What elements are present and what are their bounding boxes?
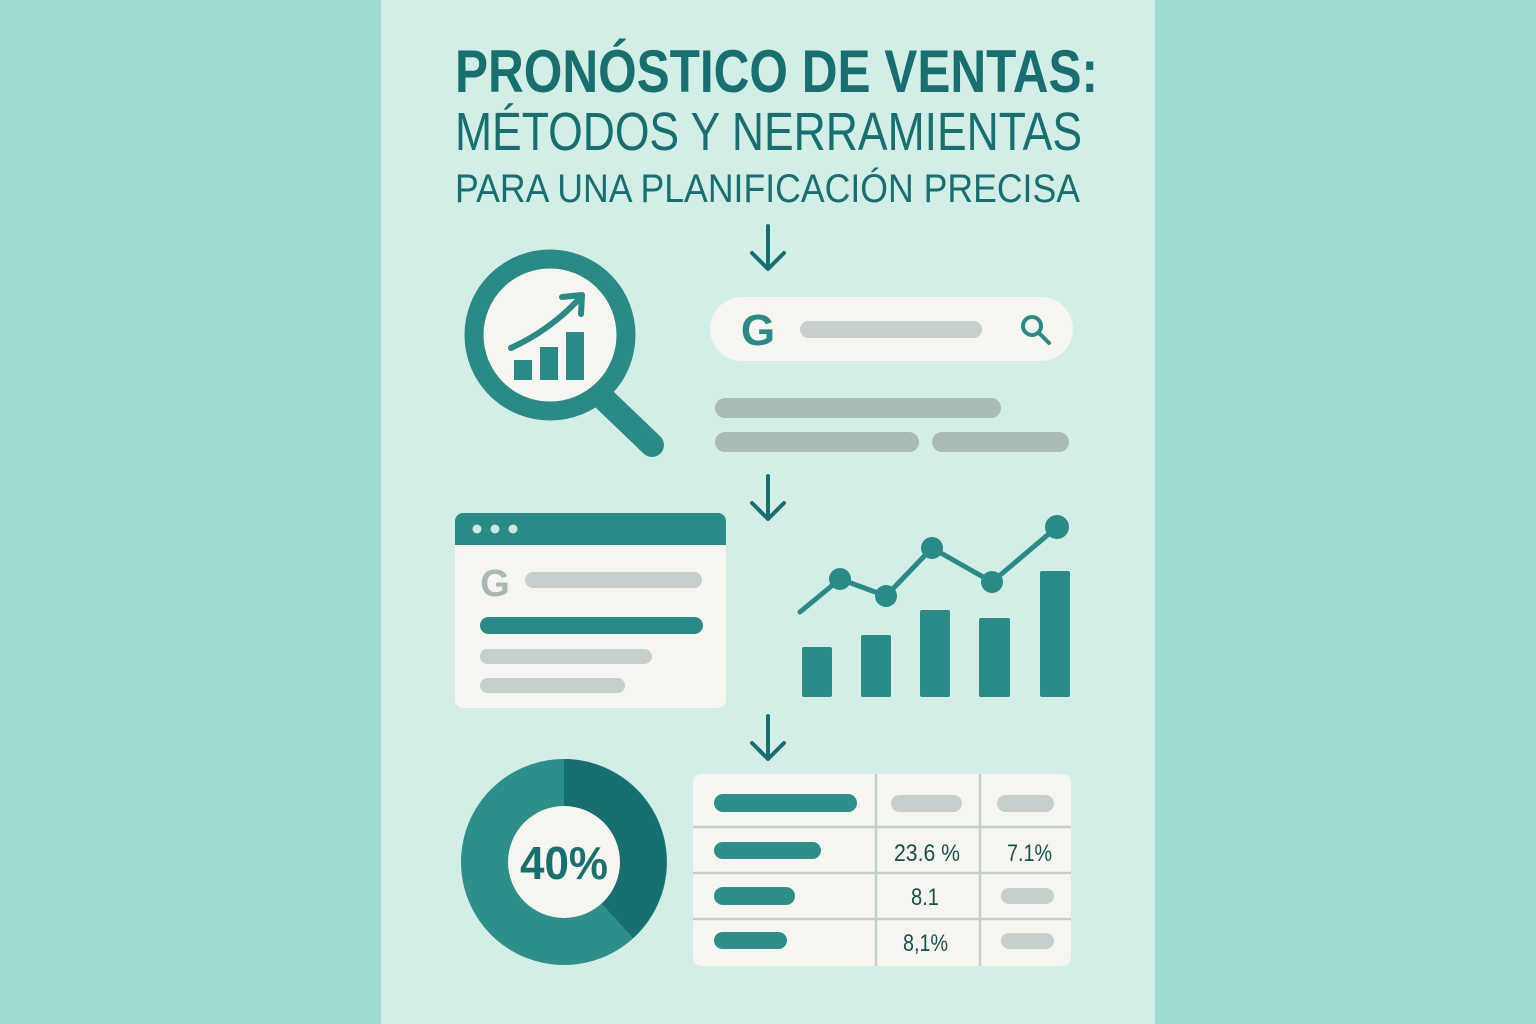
title [455,38,1098,211]
arrow 2 [752,476,784,519]
search bar [710,297,1073,361]
icon: magnifier with growth chart [474,259,652,445]
title: PRONÓSTICO DE VENTAS: [455,38,1098,105]
title: PARA UNA PLANIFICACIÓN PRECISA [455,166,1080,211]
panel: main column [381,0,1155,1024]
chart: bars with trend line [800,515,1070,697]
browser window [455,513,726,708]
data table: 23.6 % [894,840,960,867]
search bar: G [741,306,775,355]
data table: 8.1 [911,884,939,911]
data table: 7.1% [1007,840,1052,867]
donut chart 40% [461,759,667,965]
search result lines [715,398,1069,452]
data table [693,774,1071,966]
donut chart 40%: 40% [520,837,608,889]
browser window: G [480,563,510,605]
arrow 3 [752,716,784,759]
title: MÉTODOS Y NERRAMIENTAS [455,102,1082,162]
data table: 8,1% [903,930,948,957]
arrow 1 [752,226,784,269]
